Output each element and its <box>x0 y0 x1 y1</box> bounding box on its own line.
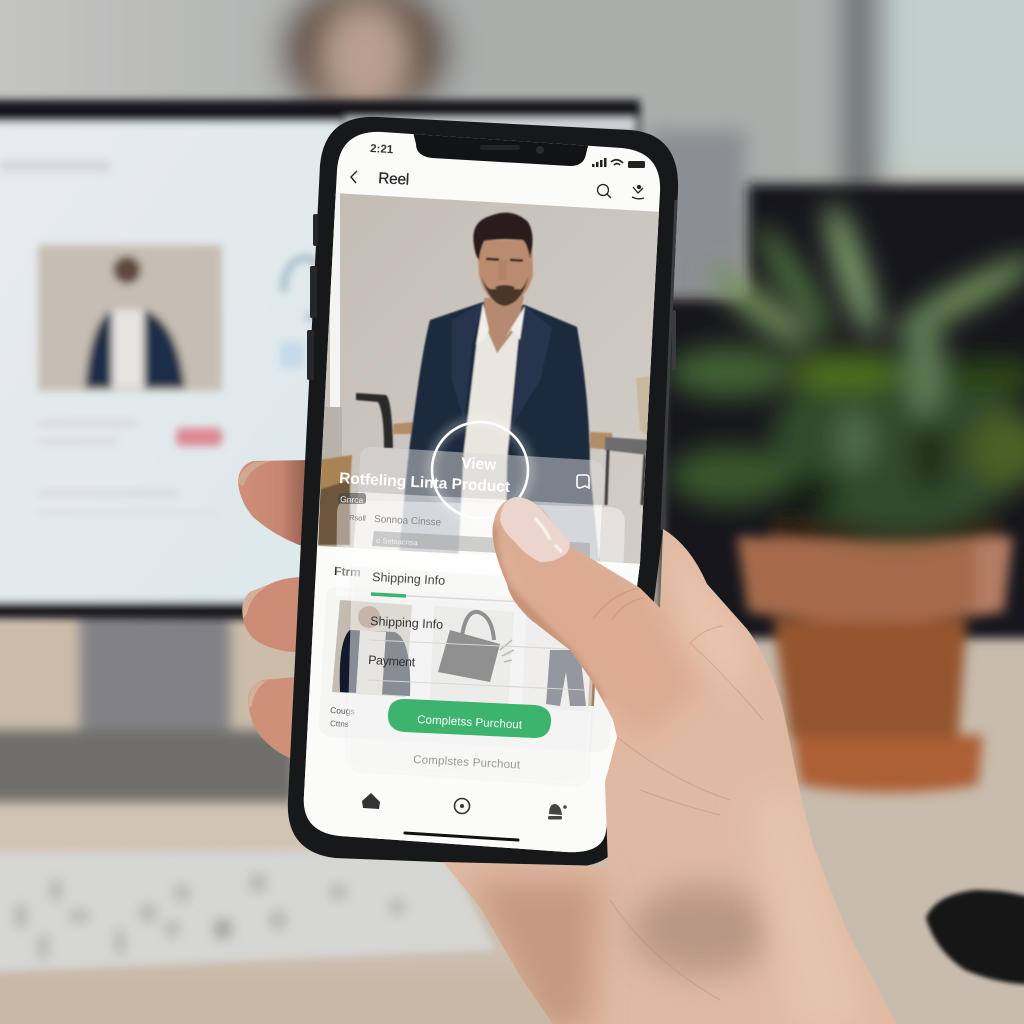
keyboard <box>0 850 495 972</box>
monitor stand and base <box>0 612 295 802</box>
thumb shading <box>492 503 694 732</box>
product card <box>330 600 595 727</box>
white lower panel <box>295 546 642 870</box>
header: back and title <box>350 170 409 185</box>
front glass card <box>348 447 605 727</box>
desk <box>0 622 1024 1024</box>
product overlay labels: Rotfeling Linta Product <box>339 470 510 496</box>
product list heading: Ftrm <box>334 564 361 579</box>
plant leaves <box>668 199 1024 537</box>
rear glass card <box>336 500 625 576</box>
checkout steps <box>368 570 600 690</box>
checkout steps: Shipping Info <box>370 614 444 632</box>
product overlay labels: View <box>461 455 498 474</box>
plant pot <box>737 515 1013 792</box>
bottom navigation <box>362 793 567 840</box>
thumb: trousers <box>522 612 596 712</box>
hand and thumb <box>430 480 910 1024</box>
status bar: 2:21 <box>370 143 394 156</box>
mouse <box>926 890 1024 985</box>
viewfinder ring <box>431 421 529 519</box>
checkout steps: Shipping Info <box>372 570 446 588</box>
green purchase button <box>388 699 551 738</box>
secondary purchase label: Complstes Purchout <box>413 754 521 772</box>
grey wall block beside phone <box>650 130 745 300</box>
reel photo <box>310 185 670 575</box>
thumbnail nail <box>500 497 570 562</box>
product overlay labels: Gnrca <box>340 494 364 505</box>
green purchase button: Completss Purchout <box>417 714 523 732</box>
phone screen <box>304 132 660 852</box>
man in blazer <box>398 213 600 570</box>
header: back and title: Reel <box>378 170 410 189</box>
product card: Cttns <box>330 719 349 729</box>
checkout steps: Payment <box>368 653 416 669</box>
desk and chair in photo <box>318 376 650 545</box>
notch <box>414 134 588 166</box>
knuckle and palm creases <box>593 588 763 1000</box>
product overlay labels: Rsoll <box>349 513 366 523</box>
dark monitor on the right <box>660 184 1024 644</box>
product overlay labels: Sonnoa Cinsse <box>374 514 442 529</box>
thumb: bag <box>430 606 514 708</box>
phone body <box>280 117 680 870</box>
product overlay labels: o Sntoacnsa <box>376 536 419 547</box>
status bar <box>370 134 645 168</box>
header icons <box>598 184 644 199</box>
thumb: man <box>332 600 412 697</box>
monitor page content <box>0 160 328 516</box>
product card: Cougs <box>330 705 355 716</box>
product overlay labels <box>338 455 590 558</box>
blurred desktop monitor <box>0 100 640 620</box>
fingers behind phone <box>238 460 310 758</box>
